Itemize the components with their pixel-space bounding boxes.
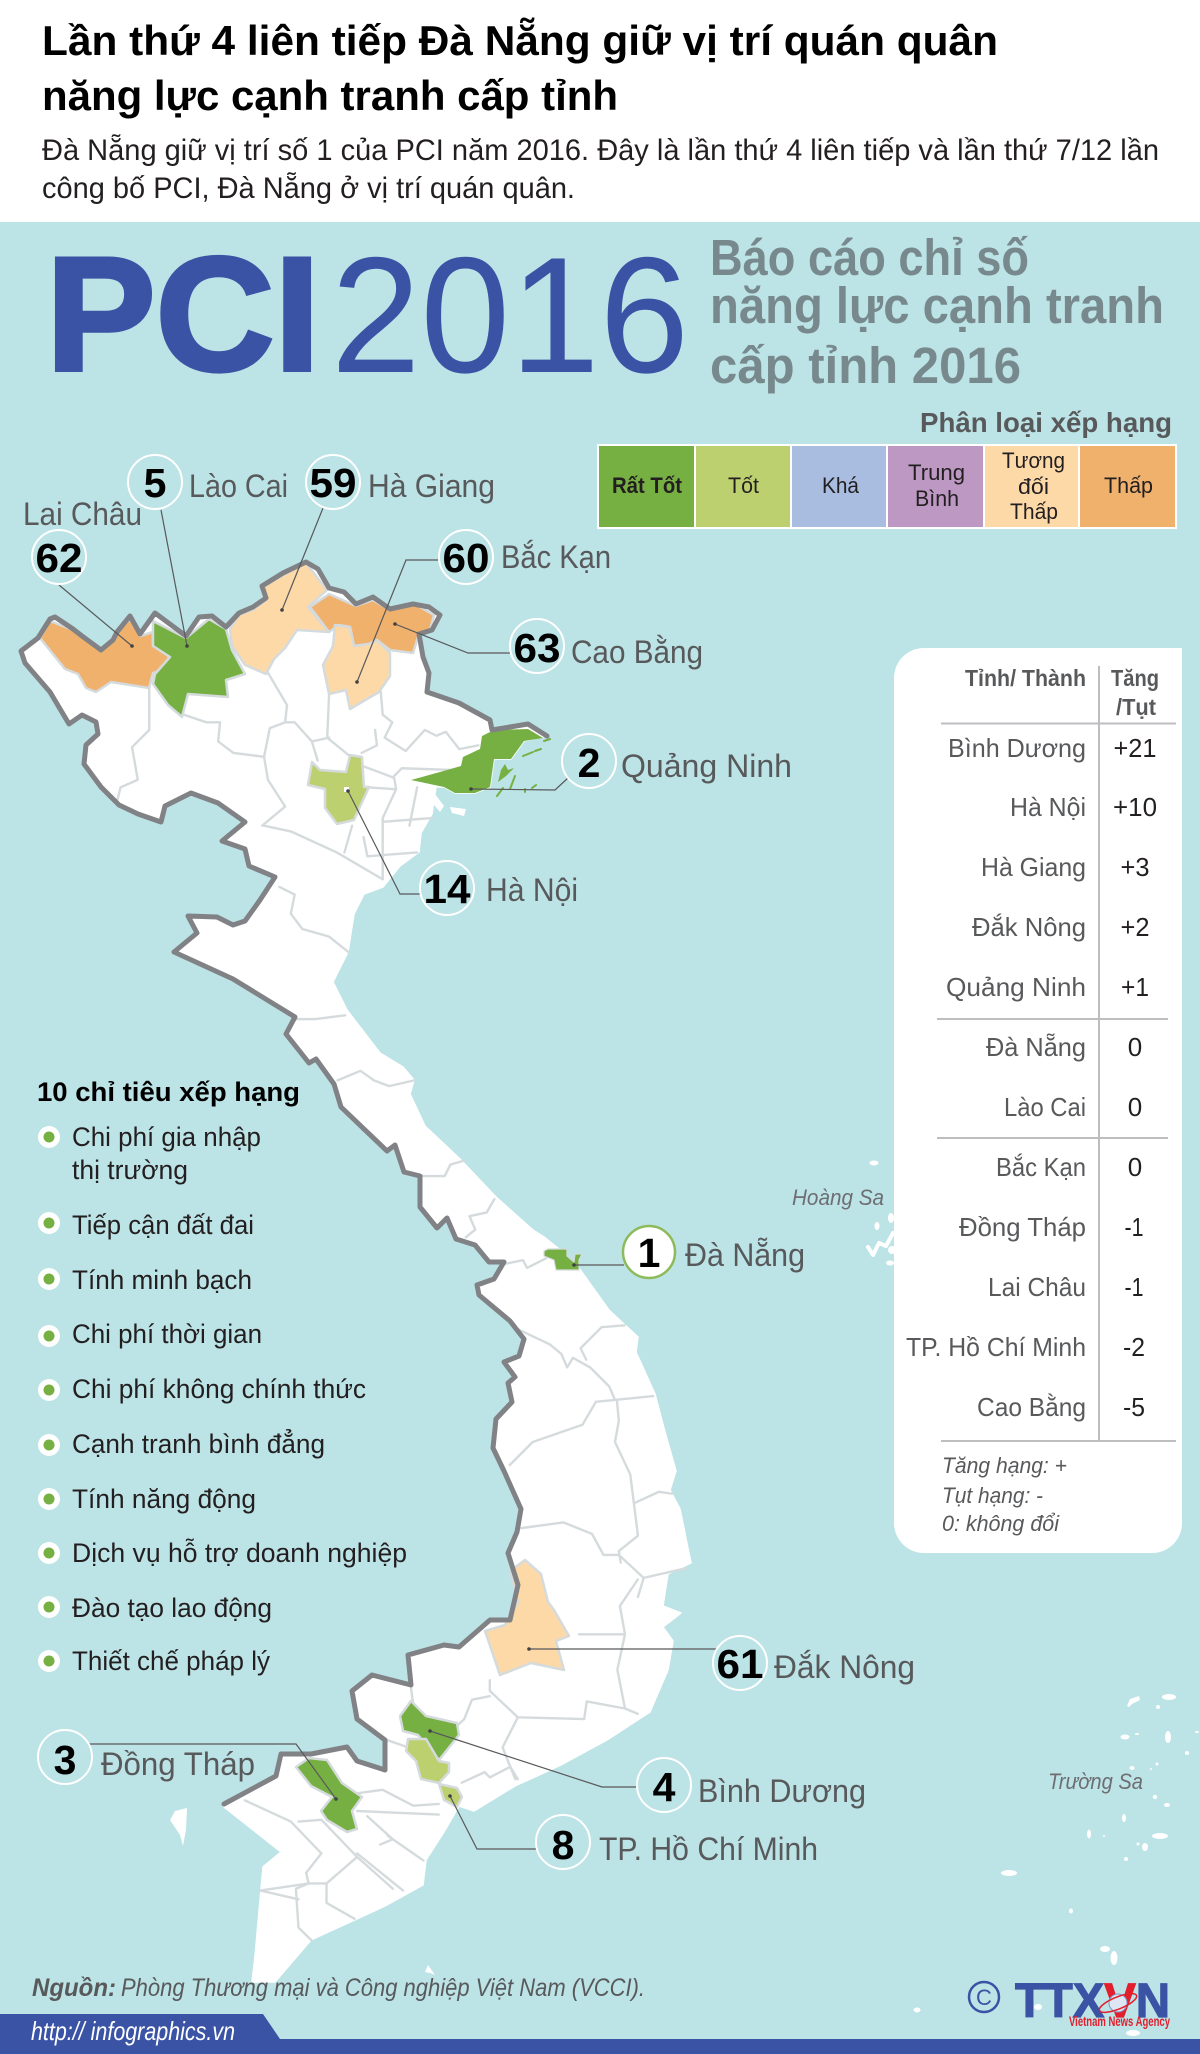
legend heading: Phân loại xếp hạng (920, 407, 1172, 438)
PCI 2016 logotype: 2016 (331, 223, 689, 407)
label: Trường Sa: Trường Sa (1048, 1769, 1143, 1794)
callout: Hà Nội: 14 (424, 866, 471, 912)
table note (942, 1453, 1067, 1536)
callout: Đồng Tháp: Đồng Tháp (101, 1746, 255, 1782)
islands: Hoàng Sa (868, 1160, 896, 1266)
callout: Bình Dương (428, 1729, 866, 1812)
criteria list: Chi phí gia nhập (72, 1122, 261, 1152)
footer url: http:// infographics.vn (31, 2016, 235, 2046)
legend: ranking categories: Bình (915, 486, 959, 511)
criteria heading: 10 chỉ tiêu xếp hạng (37, 1077, 300, 1107)
callout: Đà Nẵng: 1 (638, 1230, 660, 1276)
islands: Trường Sa (914, 1694, 1199, 2036)
table rows: Đồng Tháp (959, 1212, 1086, 1242)
border (21, 562, 547, 1804)
map of Vietnam (21, 562, 691, 1982)
report heading (710, 229, 1164, 394)
logo: TTXVN: C (976, 1985, 992, 2010)
criteria list: Thiết chế pháp lý (72, 1646, 271, 1676)
table rows: -5 (1123, 1392, 1145, 1422)
table rows: Hà Giang (981, 852, 1086, 882)
callout: Bắc Kạn: Bắc Kạn (501, 539, 611, 575)
table rows: Bắc Kạn (996, 1152, 1086, 1182)
criteria list: Chi phí thời gian (72, 1319, 262, 1349)
legend: ranking categories: Khá (822, 473, 860, 498)
callout: Lai Châu: Lai Châu (23, 496, 142, 532)
panel: 10 ranking criteria (37, 1077, 407, 1676)
callout: Đồng Tháp (38, 1730, 338, 1801)
province: Đà Nẵng (544, 1249, 582, 1270)
legend: ranking categories: Rất Tốt (612, 473, 683, 498)
table rows: 0 (1128, 1092, 1142, 1122)
table rows: Đà Nẵng (986, 1032, 1086, 1062)
criteria list: Dịch vụ hỗ trợ doanh nghiệp (72, 1538, 407, 1568)
title: Lần thứ 4 liên tiếp Đà Nẵng giữ vị trí quán quân (42, 16, 998, 64)
callout: Bình Dương: 4 (653, 1764, 676, 1810)
province: Bình Dương (400, 1701, 459, 1760)
panel: rank change table (894, 648, 1182, 1553)
callout: Cao Bằng (393, 619, 703, 673)
intro text: Đà Nẵng giữ vị trí số 1 của PCI năm 2016. Đây là lần thứ 4 liên tiếp và lần thứ 7/12 lần (42, 134, 1159, 167)
table rows: +1 (1121, 972, 1149, 1002)
legend: ranking categories: Thấp (1104, 473, 1153, 498)
province: Hà Giang (230, 563, 329, 674)
table note: Tăng hạng: + (942, 1453, 1067, 1478)
PCI 2016 logotype: PCI (46, 224, 320, 405)
callout: Hà Nội (346, 789, 578, 915)
intro text: công bố PCI, Đà Nẵng ở vị trí quán quân. (42, 172, 575, 205)
table rows: Quảng Ninh (946, 972, 1086, 1002)
table rows: Lai Châu (988, 1272, 1086, 1302)
callout: Đà Nẵng: Đà Nẵng (685, 1237, 805, 1273)
callout: Quảng Ninh (469, 734, 792, 791)
table rows: 0 (1128, 1152, 1142, 1182)
table header (965, 665, 1159, 720)
callout: Hà Nội: Hà Nội (486, 872, 578, 908)
callout: TP. Hồ Chí Minh: TP. Hồ Chí Minh (599, 1831, 818, 1867)
province: Tây Ninh area (406, 1739, 449, 1783)
logo: TTXVN: TTXVN (1015, 1975, 1170, 2028)
table header: Tăng (1111, 665, 1159, 691)
callout: Hà Giang: 59 (310, 460, 356, 506)
PCI 2016 logotype (46, 223, 689, 407)
callout: Lai Châu: 62 (36, 535, 82, 581)
table rows: -1 (1124, 1212, 1144, 1242)
table rows: Hà Nội (1010, 792, 1086, 822)
title: năng lực cạnh tranh cấp tỉnh (42, 72, 618, 119)
intro text (42, 134, 1159, 205)
callout: Lào Cai: Lào Cai (189, 468, 288, 504)
source: Phòng Thương mại và Công nghiệp Việt Nam (VCCI). (121, 1974, 645, 2002)
callout: Hà Giang (280, 455, 495, 612)
criteria list: Chi phí không chính thức (72, 1374, 366, 1404)
callout: TP. Hồ Chí Minh: 8 (552, 1822, 574, 1868)
land (21, 562, 691, 1982)
province: Cao Bằng (310, 594, 434, 653)
footer bar (0, 2014, 1200, 2054)
table rows: +2 (1120, 912, 1150, 942)
table note: Tụt hạng: - (942, 1483, 1043, 1508)
criteria list: Đào tạo lao động (72, 1593, 272, 1623)
callout: Hà Giang: Hà Giang (368, 468, 495, 504)
callout: Bắc Kạn: 60 (442, 535, 490, 581)
table rows (906, 733, 1157, 1422)
province: Lào Cai (153, 619, 245, 717)
callout: Quảng Ninh: Quảng Ninh (621, 748, 792, 784)
callout: Lào Cai (128, 455, 288, 648)
province: Lai Châu (40, 619, 170, 692)
callout: Cao Bằng: Cao Bằng (571, 634, 703, 670)
criteria list: Tiếp cận đất đai (72, 1210, 254, 1240)
title (42, 16, 998, 119)
table rows: TP. Hồ Chí Minh (906, 1332, 1086, 1362)
province: Quảng Ninh (411, 729, 550, 796)
province: Đồng Tháp (296, 1758, 362, 1832)
callout: Đà Nẵng (572, 1226, 805, 1278)
table rows: -2 (1123, 1332, 1145, 1362)
report heading: Báo cáo chỉ số (710, 229, 1029, 286)
table rows: +10 (1113, 792, 1157, 822)
legend: ranking categories: Trung (908, 460, 965, 485)
legend: ranking categories: Tương (1002, 448, 1065, 473)
legend: ranking categories (597, 444, 1177, 529)
source: Nguồn: (32, 1974, 116, 2002)
table rows: Đắk Nông (972, 912, 1086, 942)
table rows: +21 (1114, 733, 1156, 763)
callout: Bắc Kạn (355, 530, 611, 684)
table rows: Cao Bằng (977, 1392, 1086, 1422)
criteria bullets (38, 1126, 60, 1672)
criteria list: thị trường (72, 1155, 188, 1185)
criteria list: Tính minh bạch (72, 1265, 252, 1295)
table header: Tỉnh/ Thành (965, 665, 1086, 691)
callout: Quảng Ninh: 2 (578, 740, 600, 786)
legend: ranking categories: Tốt (728, 473, 759, 498)
callout: Đắk Nông (527, 1636, 915, 1690)
table rows: Lào Cai (1004, 1092, 1086, 1122)
province: Bắc Kạn (323, 625, 390, 709)
legend: ranking categories: Thấp (1010, 499, 1058, 524)
criteria list: Tính năng động (72, 1484, 256, 1514)
table header: /Tụt (1116, 694, 1156, 720)
callout: Đắk Nông: 61 (716, 1641, 764, 1687)
report heading: cấp tỉnh 2016 (710, 337, 1021, 394)
table rows: Bình Dương (948, 733, 1086, 763)
legend: ranking categories: đối (1018, 474, 1049, 499)
table rows: +3 (1120, 852, 1150, 882)
criteria list (72, 1122, 407, 1676)
province: TP. Hồ Chí Minh (439, 1784, 462, 1807)
table rows: -1 (1124, 1272, 1144, 1302)
table rows: 0 (1128, 1032, 1142, 1062)
callout: Lai Châu (23, 496, 142, 648)
callout: Cao Bằng: 63 (514, 625, 560, 671)
report heading: năng lực cạnh tranh (710, 277, 1164, 334)
callout: TP. Hồ Chí Minh (448, 1794, 818, 1869)
callout: Đắk Nông: Đắk Nông (774, 1649, 915, 1685)
callout: Bình Dương: Bình Dương (698, 1773, 866, 1809)
label: Hoàng Sa: Hoàng Sa (792, 1185, 884, 1210)
province: Hà Nội (308, 755, 369, 824)
callout: Lào Cai: 5 (144, 460, 166, 506)
table note: 0: không đổi (942, 1511, 1060, 1536)
white islands (170, 790, 466, 1975)
callout: Đồng Tháp: 3 (54, 1737, 76, 1783)
criteria list: Cạnh tranh bình đẳng (72, 1429, 325, 1459)
province: Đắk Nông (485, 1560, 569, 1675)
